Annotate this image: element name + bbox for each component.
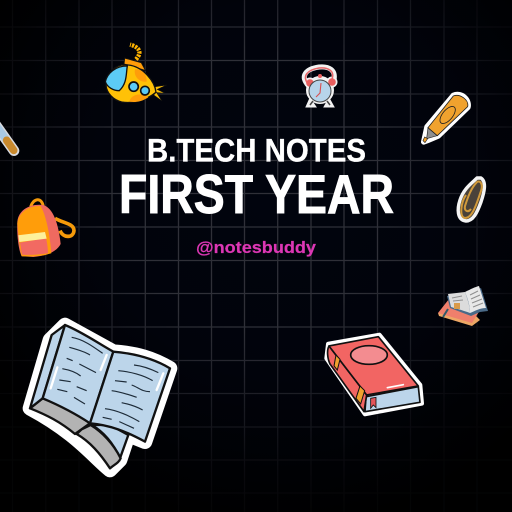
icon: paperclip bbox=[458, 178, 484, 221]
tube glass bbox=[0, 125, 14, 151]
stack page picture bbox=[454, 303, 460, 309]
clock handle bbox=[305, 68, 333, 84]
icon: backpack bbox=[17, 200, 74, 257]
stack open book cover bbox=[447, 288, 488, 316]
icon: red book sticker bbox=[327, 335, 422, 414]
book highlights bbox=[51, 355, 163, 390]
tube liquid blue bbox=[0, 125, 6, 139]
book gray edges bbox=[30, 398, 121, 468]
book right page bbox=[90, 352, 170, 442]
backpack strap bbox=[55, 218, 74, 236]
submarine portholes bbox=[129, 82, 149, 95]
icon: stacked books bbox=[438, 286, 488, 326]
backpack body bbox=[17, 205, 61, 257]
red book pages bbox=[365, 387, 420, 412]
marker label bbox=[437, 104, 458, 126]
book back wedge bbox=[92, 425, 128, 458]
backpack orange front bbox=[17, 206, 51, 257]
paperclip outline bbox=[458, 178, 484, 221]
book side bbox=[30, 325, 65, 408]
backpack pocket bbox=[20, 238, 48, 255]
submarine body bbox=[106, 65, 156, 103]
clock face bbox=[309, 80, 331, 102]
backpack handle bbox=[31, 200, 43, 207]
red book highlight bbox=[387, 385, 403, 388]
clock hands bbox=[316, 83, 321, 97]
book text lines bbox=[57, 337, 158, 428]
book left page bbox=[43, 325, 113, 423]
red book cover bbox=[329, 337, 418, 395]
submarine spots bbox=[129, 69, 148, 102]
red book bands bbox=[334, 355, 365, 404]
stack right page bbox=[465, 286, 486, 313]
icon: open book sticker bbox=[30, 325, 170, 470]
icon: test tube bbox=[0, 125, 14, 151]
marker tip bbox=[427, 128, 437, 139]
icon: highlighter marker bbox=[423, 94, 468, 143]
marker outline bbox=[424, 94, 468, 142]
submarine fins bbox=[154, 85, 167, 101]
marker body bbox=[428, 95, 468, 136]
icon: submarine bbox=[105, 45, 167, 103]
red book white outline bbox=[327, 335, 422, 414]
book white outline bbox=[30, 325, 170, 470]
handle: @notesbuddy: @notesbuddy bbox=[196, 238, 317, 257]
marker nib bbox=[423, 137, 428, 143]
backpack yellow band bbox=[18, 232, 47, 242]
submarine tower bbox=[124, 58, 146, 71]
clock feet bbox=[310, 101, 330, 105]
red book spine bbox=[328, 346, 367, 412]
clock white outline bbox=[304, 67, 337, 107]
clock bells bbox=[306, 74, 336, 87]
red book ribbon bbox=[371, 397, 376, 408]
stack text lines bbox=[452, 291, 483, 307]
title: First Year: FIRST YEAR bbox=[119, 164, 394, 225]
icon: alarm clock bbox=[304, 67, 337, 107]
title: B.Tech Notes: B.TECH NOTES bbox=[147, 132, 366, 168]
tube liquid orange bbox=[7, 140, 14, 150]
submarine window bbox=[105, 66, 127, 91]
stack lower book edge bbox=[438, 313, 480, 326]
paperclip wire bbox=[461, 182, 482, 218]
stack left page bbox=[448, 292, 470, 313]
stack lower book cover bbox=[438, 299, 480, 323]
submarine periscope bbox=[130, 45, 139, 59]
red book oval bbox=[351, 346, 387, 364]
stack book strap bbox=[443, 309, 448, 317]
